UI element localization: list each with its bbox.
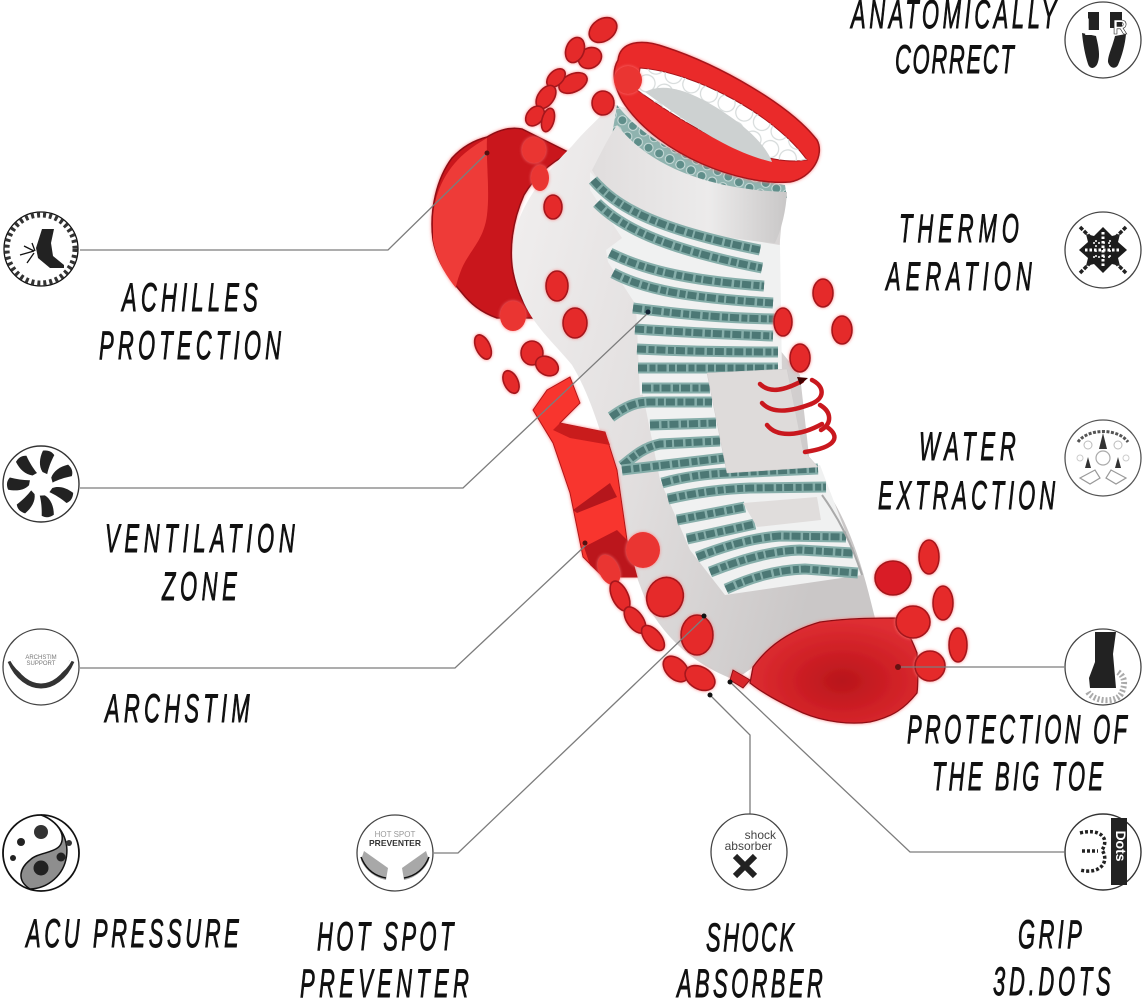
label: anatomically correct [850, 0, 1058, 82]
icon: acu pressure yin yang [3, 815, 79, 891]
label: water extraction [878, 424, 1056, 518]
icon: water extraction [1065, 420, 1141, 496]
label: ventilation zone [105, 516, 295, 609]
label: protection of the big toe: THE BIG TOE [932, 754, 1103, 799]
icon: grip 3D dots [1065, 814, 1141, 890]
label: water extraction: EXTRACTION [878, 473, 1056, 518]
inner knit mesh [612, 105, 787, 198]
red grip dots [471, 12, 967, 696]
icon: shock absorber: shock [745, 828, 777, 842]
compression panel [707, 369, 818, 473]
sock body [513, 104, 875, 680]
label: protection of the big toe: PROTECTION OF [907, 707, 1129, 752]
label: thermo aeration: THERMO [899, 206, 1019, 251]
red toe cap [730, 618, 918, 723]
icon: anatomically correct feet: R [1113, 17, 1128, 39]
red heel panel (Achilles) [432, 128, 570, 318]
label: shock absorber [676, 915, 823, 1000]
icon: protection of the big toe [1065, 629, 1141, 705]
icon: archstim [3, 629, 79, 705]
icon: Achilles protection [4, 212, 78, 286]
leader lines [80, 150, 1064, 853]
lower overlay patch [743, 497, 821, 527]
label: thermo aeration: AERATION [885, 254, 1032, 299]
label: grip 3D dots [993, 912, 1111, 1000]
label: Achilles protection [99, 275, 282, 368]
label: thermo aeration [885, 206, 1032, 299]
label: shock absorber: SHOCK [706, 915, 795, 960]
label: grip 3D dots: GRIP [1018, 912, 1082, 957]
icon: grip 3D dots: Dots [1113, 830, 1129, 862]
red top cuff ring [614, 42, 819, 182]
label: hot spot preventer: HOT SPOT [317, 914, 455, 959]
icon: anatomically correct feet: L [1084, 14, 1098, 41]
icon: hot spot preventer: HOT SPOT [375, 830, 415, 839]
icon: hot spot preventer [357, 815, 433, 891]
upper cuff band [592, 125, 787, 243]
label: ventilation zone: ZONE [161, 564, 237, 609]
red arch panel [533, 377, 637, 577]
label: water extraction: WATER [919, 424, 1016, 469]
icon: ventilation fan [3, 446, 79, 522]
illustration: exploded compression sock [432, 12, 967, 723]
label: Achilles protection: ACHILLES [121, 275, 258, 320]
icon: hot spot preventer: PREVENTER [369, 838, 421, 848]
icon: archstim: SUPPORT [27, 661, 56, 667]
ventilation stripes [593, 180, 862, 589]
label: Achilles protection: PROTECTION [99, 323, 282, 368]
label: acu pressure: ACU PRESSURE [25, 911, 239, 956]
icon: shock absorber [711, 814, 787, 890]
label: hot spot preventer [300, 914, 469, 1000]
label: archstim: ARCHSTIM [104, 686, 250, 731]
icon: anatomically correct feet [1065, 2, 1141, 78]
icon: thermo aeration [1065, 212, 1141, 288]
compression spiral arrows [760, 377, 834, 452]
label: protection of the big toe [907, 707, 1129, 799]
label: anatomically correct: CORRECT [895, 37, 1015, 82]
label: ventilation zone: VENTILATION [105, 516, 295, 561]
icon: archstim: ARCHSTIM [25, 655, 57, 661]
icon: shock absorber: absorber [725, 839, 772, 853]
white backing behind stripes [590, 172, 862, 595]
